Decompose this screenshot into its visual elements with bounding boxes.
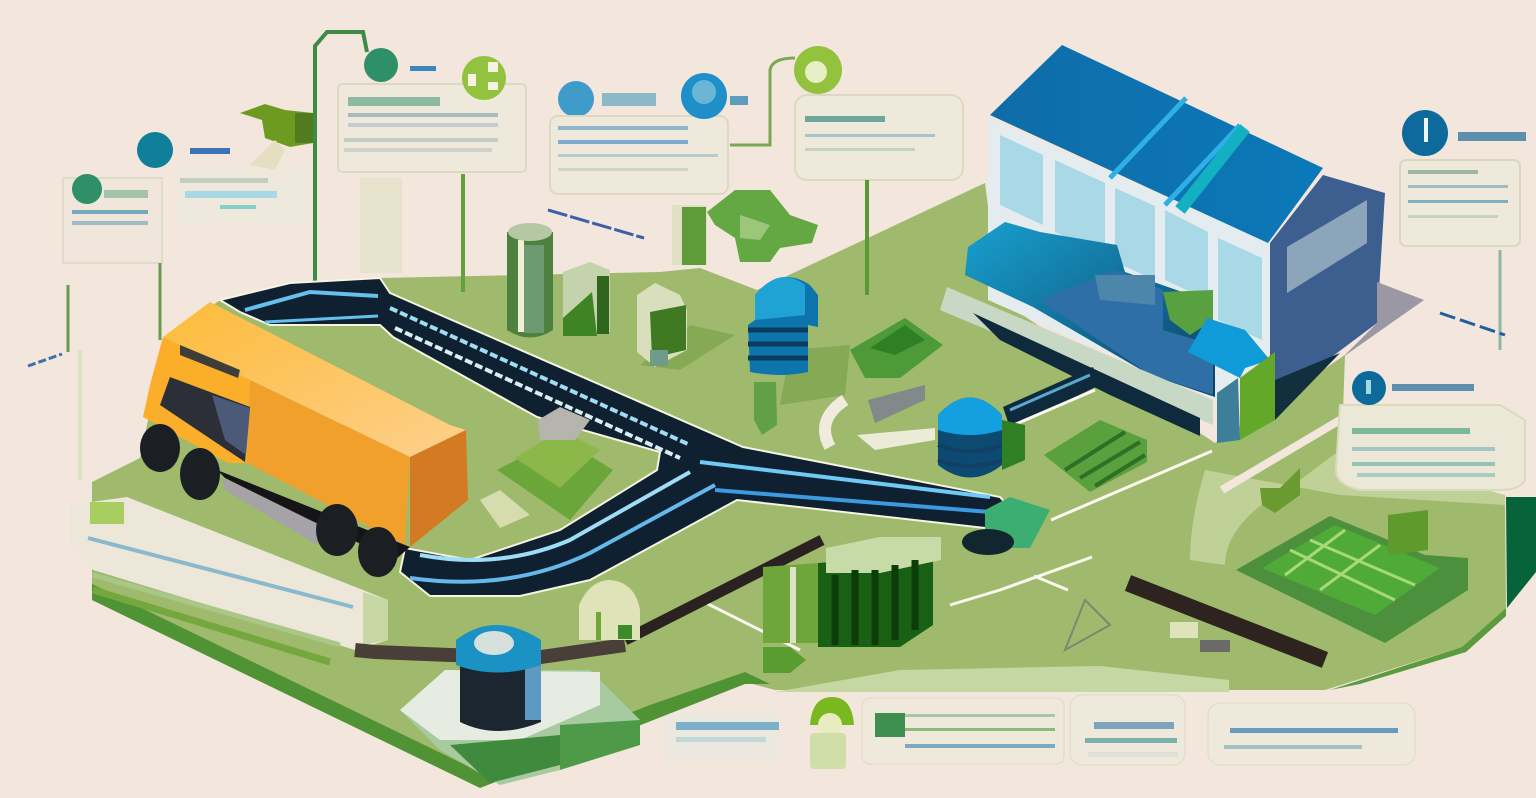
icon: green solar field lower right <box>1236 510 1468 643</box>
panel: far left card <box>28 174 162 480</box>
icon: green badge with connector <box>315 32 436 282</box>
panel: center card <box>550 81 728 194</box>
icon: green solar farm center bottom <box>763 537 941 673</box>
icon: road end capsule <box>962 497 1050 555</box>
icon: garden and pale path near tank <box>825 318 943 450</box>
panel: right center card <box>795 95 963 295</box>
icon: orange truck <box>140 302 468 577</box>
panel: right lower card <box>1336 371 1525 490</box>
icon: dashed blue line <box>548 210 644 238</box>
icon: dark pipe bottom <box>355 540 1325 660</box>
panel: top left card <box>338 84 526 172</box>
building with solar roof <box>940 45 1424 443</box>
icon: small tree <box>1260 468 1300 513</box>
white paths <box>700 451 1212 650</box>
icon: small machinery <box>1170 622 1230 652</box>
icon: glass bottle <box>637 283 687 367</box>
icon: lime recycling badge <box>462 56 506 100</box>
blue lower hall <box>965 222 1215 397</box>
faded shadow patches <box>640 325 735 370</box>
road network <box>220 278 1020 596</box>
panel: bottom cards row <box>666 695 1415 769</box>
stem: top card <box>461 174 465 292</box>
icon: green plant upper left <box>240 104 313 170</box>
icon: blue stacked tank center <box>748 277 818 435</box>
small grey frame <box>1065 600 1110 650</box>
icon: blue stacked tank lower <box>938 367 1100 478</box>
icon: green crop plot near road <box>1044 420 1147 492</box>
ground: green isometric terrain <box>92 183 1536 788</box>
icon: lime badge with connector <box>730 46 842 145</box>
icon: black and blue cistern <box>400 625 640 785</box>
panel: left upper card with badge <box>137 132 310 225</box>
dashed arrow right <box>1440 313 1505 335</box>
icon: bottom arch gate <box>579 580 640 640</box>
faded pillar under top card <box>360 178 402 273</box>
icon: blue badge <box>681 73 748 119</box>
icon: green plants on frame <box>672 190 818 265</box>
panel: bottom left card <box>70 497 388 662</box>
icon: small green block <box>563 262 610 336</box>
icon: green platform on road <box>480 407 613 528</box>
panel: right top card <box>1400 110 1526 350</box>
icon: green cylinder tank <box>507 223 553 338</box>
pale strip beside card <box>1222 420 1340 490</box>
